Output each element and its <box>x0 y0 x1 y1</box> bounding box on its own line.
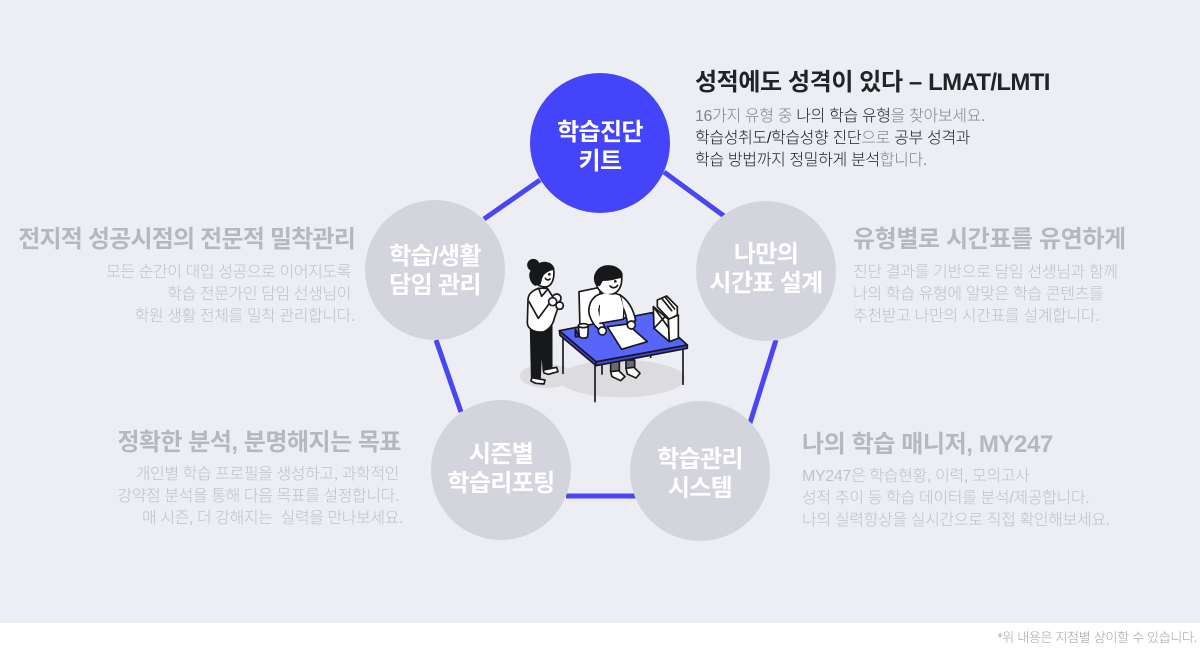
text block: 유형별로 시간표를 유연하게: 진단 결과를 기반으로 담임 선생님과 함께 <box>853 264 1118 281</box>
circle: 시즌별 학습리포팅 <box>431 400 571 540</box>
text block: 나의 학습 매니저: 나의 실력향상을 실시간으로 직접 확인해보세요. <box>802 512 1110 529</box>
text block: LMAT/LMTI: 학습 방법까지 정밀하게 분석합니다. <box>695 152 927 169</box>
text block: 나의 학습 매니저: 성적 추이 등 학습 데이터를 분석/제공합니다. <box>802 490 1089 507</box>
text block: 전지적 성공시점 <box>18 226 355 325</box>
circle: 학습관리 시스템 <box>630 401 770 541</box>
circle: 학습관리 시스템: 학습관리 <box>657 446 743 473</box>
text block: 전지적 성공시점: 학습 전문가인 담임 선생님이 <box>167 286 351 303</box>
circle: 학습진단 키트 <box>530 73 670 213</box>
woman <box>527 260 563 384</box>
text block: 전지적 성공시점: 모든 순간이 대입 성공으로 이어지도록 <box>106 264 351 281</box>
text block: 정확한 분석 <box>117 429 403 527</box>
circle: 학습관리 시스템: 시스템 <box>668 475 732 502</box>
text block: 정확한 분석: 개인별 학습 프로필을 생성하고, 과학적인 <box>136 466 399 483</box>
circle: 나만의 시간표 설계 <box>696 201 836 341</box>
text block: 정확한 분석: 정확한 분석, 분명해지는 목표 <box>117 429 401 456</box>
floor shadows <box>520 360 685 397</box>
desk legs <box>563 338 683 402</box>
man: head, arms, paper, hands <box>575 266 678 349</box>
text block: 유형별로 시간표를 유연하게: 추천받고 나만의 시간표를 설계합니다. <box>853 308 1099 325</box>
text block: 나의 학습 매니저: MY247은 학습현황, 이력, 모의고사 <box>802 468 1030 485</box>
circle: 시즌별 학습리포팅: 시즌별 <box>469 441 533 468</box>
text block: 정확한 분석: 매 시즌, 더 강해지는 실력을 만나보세요. <box>142 510 403 527</box>
circle: 학습진단 키트: 키트 <box>579 148 621 175</box>
footnote: *위 내용은 지점별 상이할 수 있습니다. <box>997 630 1197 645</box>
text block: 나의 학습 매니저 <box>802 431 1110 529</box>
circle: 학습/생활 담임 관리 <box>365 200 505 340</box>
circle: 나만의 시간표 설계: 나만의 <box>734 241 798 268</box>
text block: 유형별로 시간표를 유연하게 <box>853 226 1126 325</box>
man: chair, legs, torso <box>579 287 640 381</box>
desk top <box>559 313 687 366</box>
circle: 학습/생활 담임 관리: 학습/생활 <box>389 243 481 270</box>
circle: 시즌별 학습리포팅: 학습리포팅 <box>447 470 555 497</box>
circle: 학습/생활 담임 관리: 담임 관리 <box>389 272 481 299</box>
text block: 유형별로 시간표를 유연하게: 유형별로 시간표를 유연하게 <box>853 226 1126 253</box>
text block: LMAT/LMTI <box>695 69 1050 169</box>
text block: 나의 학습 매니저: 나의 학습 매니저, MY247 <box>802 431 1053 458</box>
text block: LMAT/LMTI: 학습성취도/학습성향 진단으로 공부 성격과 <box>695 130 970 147</box>
text block: LMAT/LMTI: 16가지 유형 중 나의 학습 유형을 찾아보세요. <box>695 108 985 125</box>
circle: 나만의 시간표 설계: 시간표 설계 <box>709 270 823 297</box>
text block: 전지적 성공시점: 전지적 성공시점의 전문적 밀착관리 <box>18 226 355 253</box>
books and box <box>657 296 677 319</box>
text block: 유형별로 시간표를 유연하게: 나의 학습 유형에 알맞은 학습 콘텐츠를 <box>853 286 1103 303</box>
text block: 정확한 분석: 강약점 분석을 통해 다음 목표를 설정합니다. <box>117 488 399 505</box>
text block: LMAT/LMTI: 성적에도 성격이 있다 – LMAT/LMTI <box>695 69 1050 96</box>
mug <box>575 329 579 337</box>
text block: 전지적 성공시점: 학원 생활 전체를 밀착 관리합니다. <box>135 308 355 325</box>
circle: 학습진단 키트: 학습진단 <box>557 119 643 146</box>
